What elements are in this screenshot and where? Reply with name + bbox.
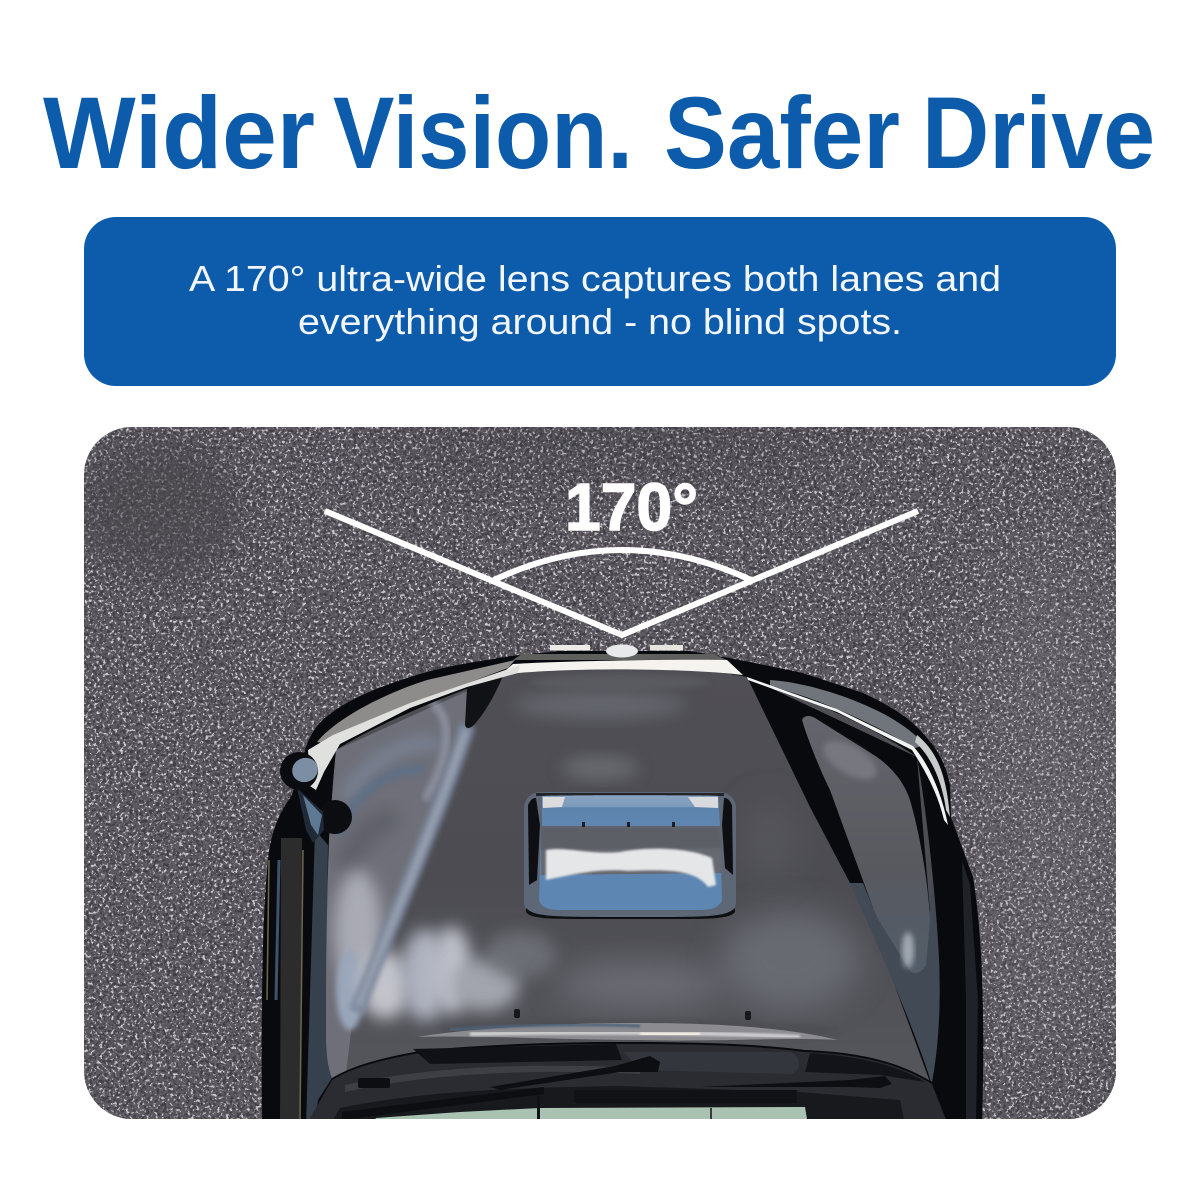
scoop pins xyxy=(582,822,675,827)
crease band xyxy=(356,725,468,1012)
arrow: 170 degree viewing angle lines xyxy=(325,511,918,635)
right blue strip xyxy=(850,880,945,1085)
panel: description banner xyxy=(84,217,1116,386)
centre clouds xyxy=(515,691,685,719)
banner text line 2: everything around - no blind spots. xyxy=(298,301,902,342)
scoop flap xyxy=(542,795,720,826)
left headlamp xyxy=(317,660,515,745)
wiper blades xyxy=(342,1087,544,1120)
asphalt ground xyxy=(80,410,1130,1119)
left fender sky arcs xyxy=(345,743,440,800)
scoop cloud reflection xyxy=(546,849,716,887)
title: Wider xyxy=(43,76,315,190)
angle label: 170° xyxy=(565,470,698,545)
banner text line 1: A 170° ultra-wide lens captures both lanes and xyxy=(189,258,1001,299)
vent grille xyxy=(358,1078,390,1088)
scoop top rim xyxy=(536,793,724,796)
title: Drive xyxy=(922,76,1155,190)
arc: viewing angle xyxy=(494,550,751,580)
car body xyxy=(262,651,983,1125)
cowl and wipers xyxy=(306,1044,948,1125)
hood xyxy=(326,668,940,1082)
hood scoop xyxy=(524,792,736,919)
right fender panel xyxy=(802,716,930,973)
car xyxy=(262,644,983,1125)
panel: car photo on asphalt xyxy=(80,410,1130,1125)
scoop body xyxy=(524,792,736,918)
title: Vision. xyxy=(333,76,633,190)
scoop lower surface xyxy=(539,827,722,910)
windscreen xyxy=(376,1107,807,1119)
right side sill xyxy=(962,860,978,1125)
left side sill and tyre xyxy=(267,830,332,1125)
scoop side pockets and lower rim xyxy=(526,798,735,919)
front bumper parts xyxy=(513,644,727,660)
hood bolts xyxy=(514,1009,751,1020)
hood reflections xyxy=(320,674,945,1090)
right headlamp xyxy=(770,680,925,748)
chrome strips xyxy=(500,660,743,675)
mirror xyxy=(280,752,352,843)
left fender panel tone xyxy=(326,691,467,1078)
wiper arms xyxy=(490,1056,660,1090)
title xyxy=(43,76,1155,190)
hood crease strip xyxy=(417,1023,838,1040)
title: Safer xyxy=(664,76,900,190)
left hood dark wedge xyxy=(465,676,503,728)
right dark wedge xyxy=(747,677,945,1090)
lower left clouds xyxy=(334,870,382,990)
lower hood shadow xyxy=(440,1020,840,1040)
